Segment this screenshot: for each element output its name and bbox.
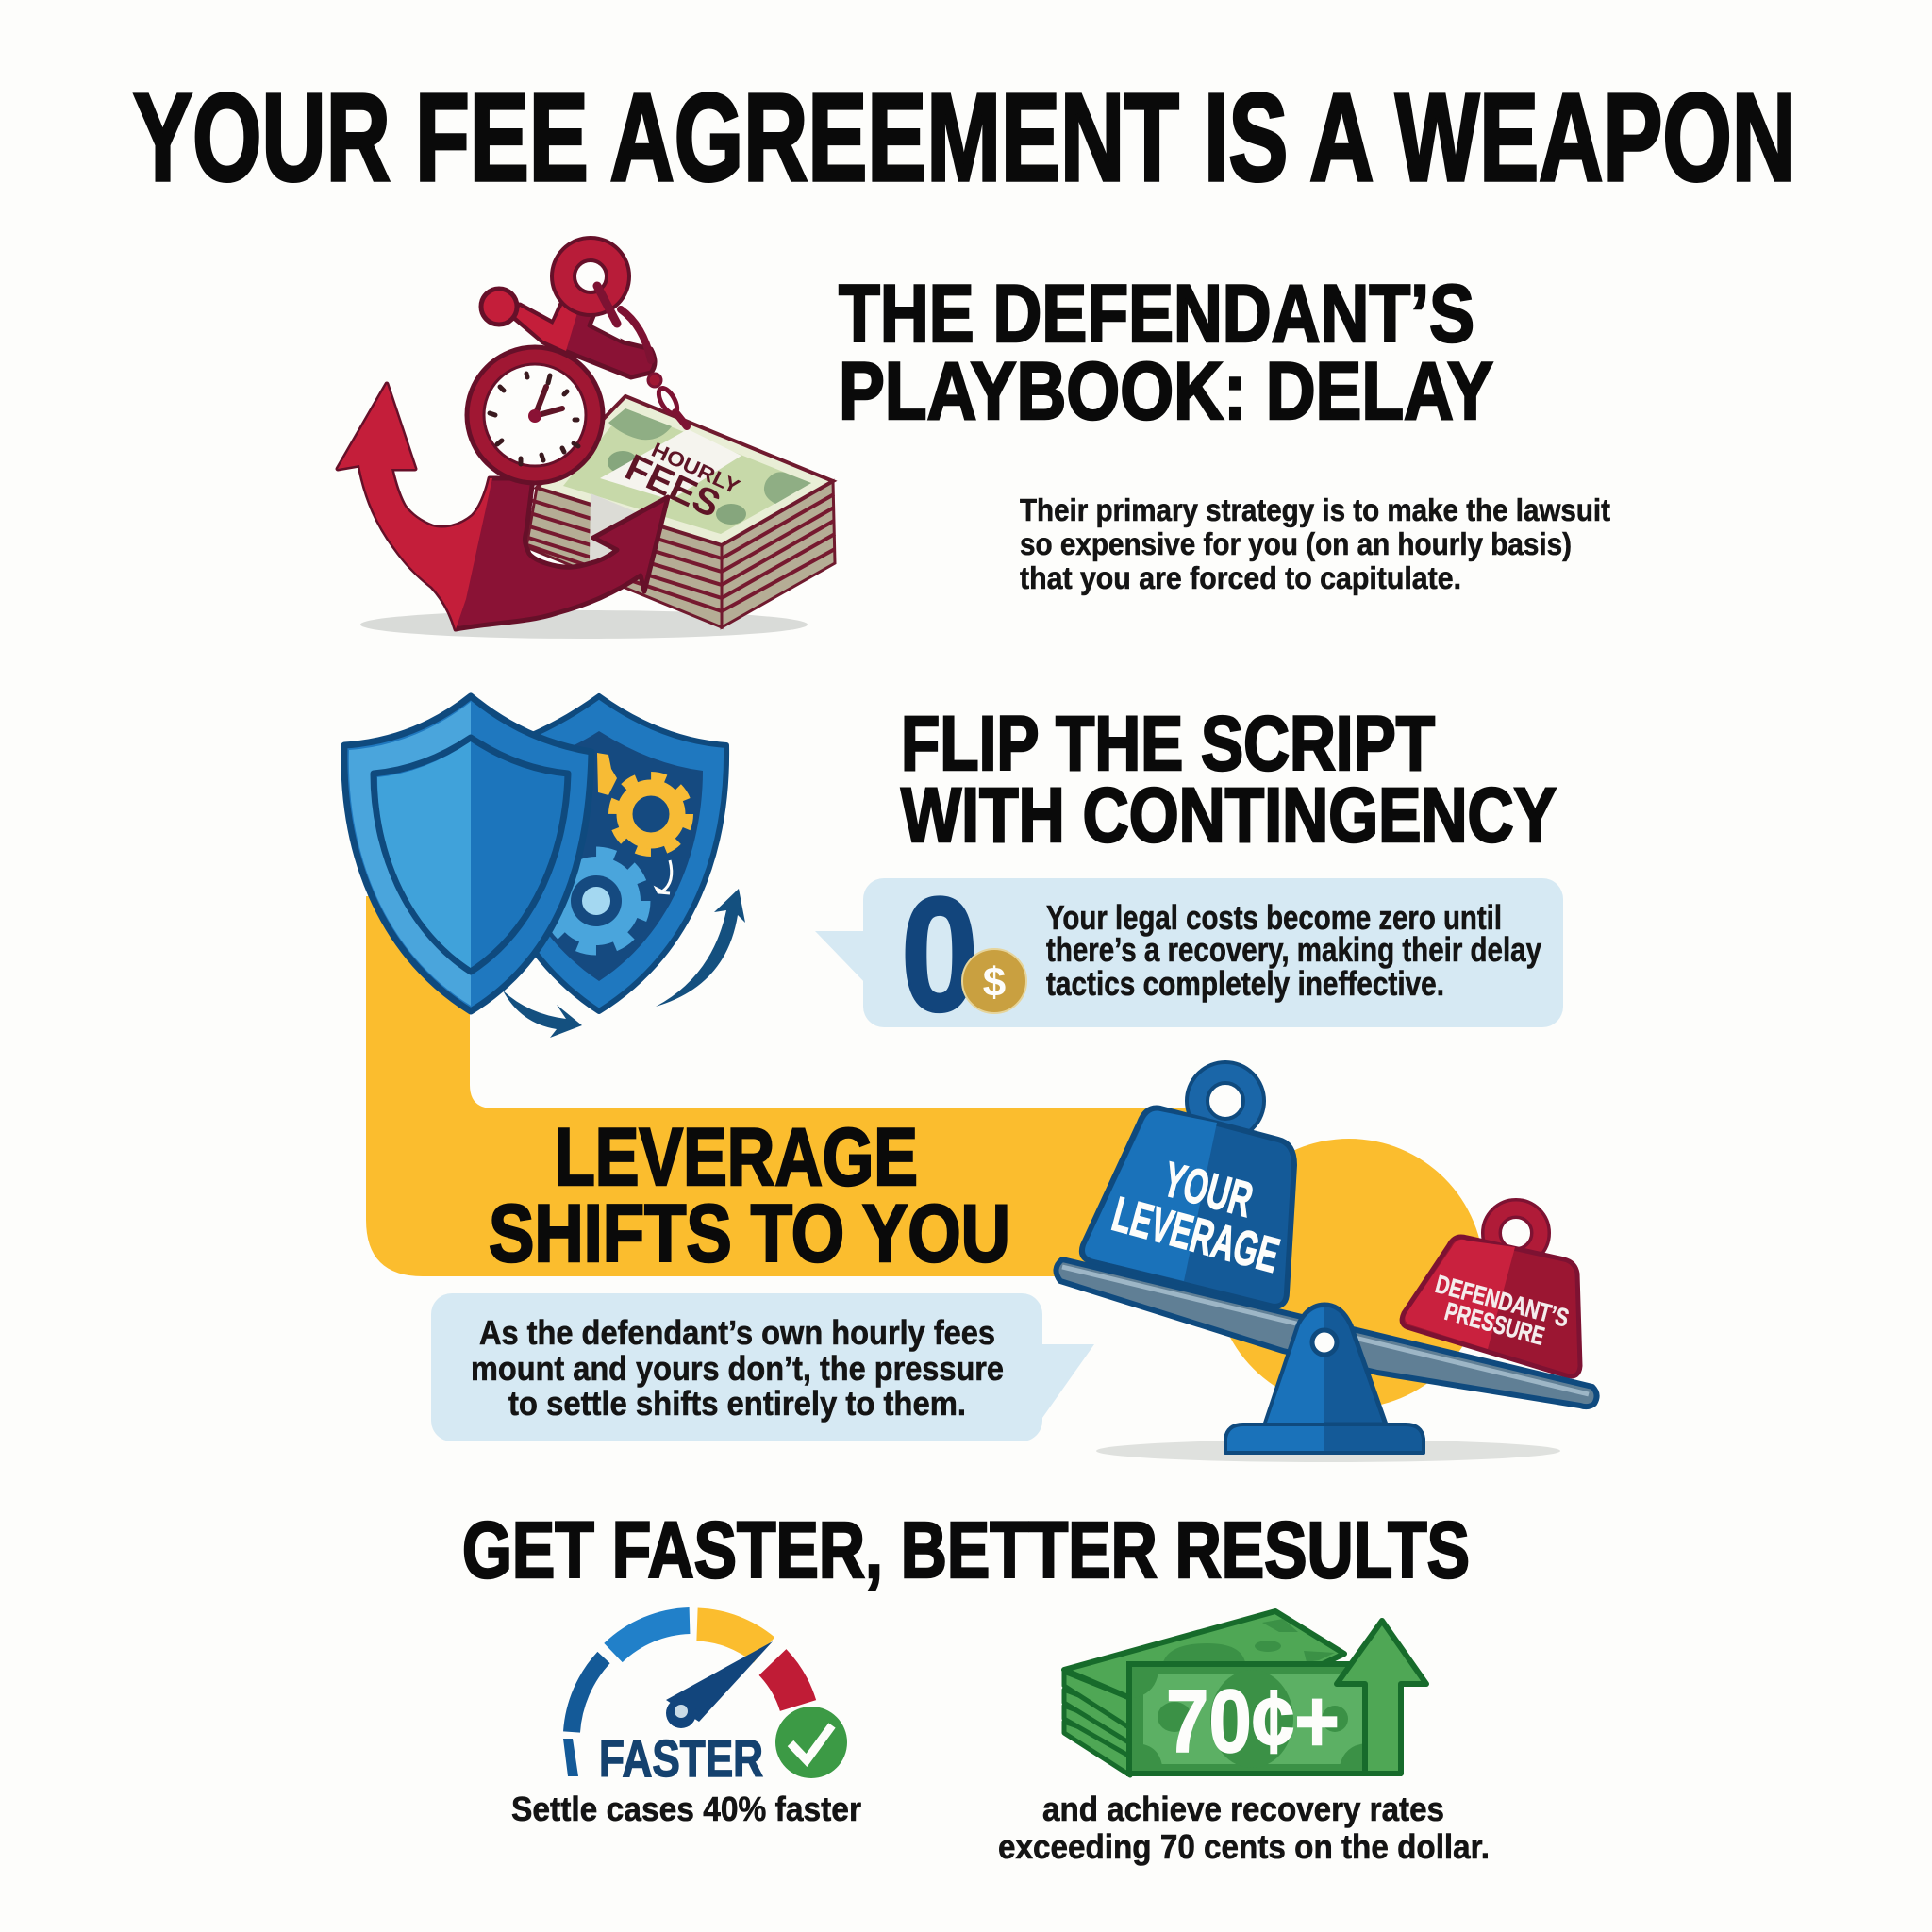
heading: leverage shifts to you: LEVERAGE [555, 1112, 918, 1203]
heading: the defendant's playbook: PLAYBOOK: DELAY [839, 346, 1493, 437]
weight: your leverage: YOUR [1158, 1152, 1258, 1228]
money stack [526, 396, 835, 627]
weight: defendant's pressure: PRESSURE [1441, 1297, 1547, 1351]
stat text: recovery rates: and achieve recovery rates [1042, 1790, 1444, 1828]
callout: pressure to settle: to settle shifts entirely to them. [508, 1384, 966, 1423]
heading: leverage shifts to you [489, 1112, 1010, 1279]
stat text: settle cases: Settle cases 40% faster [511, 1790, 861, 1828]
stat text: recovery rates: exceeding 70 cents on the dollar. [998, 1827, 1490, 1866]
back bill [1064, 1611, 1344, 1698]
icon: green check [775, 1707, 847, 1778]
text block: primary strategy: so expensive for you (on an hourly basis) [1020, 526, 1572, 561]
front bill [1129, 1664, 1399, 1774]
front shield [344, 696, 591, 1011]
needle [666, 1641, 773, 1728]
callout: pressure to settle [431, 1293, 1094, 1441]
callout text: there’s a recovery, making their delay [1046, 930, 1541, 969]
clock [467, 347, 603, 483]
yellow leverage band [366, 896, 1189, 1276]
text block: primary strategy: Their primary strategy is to make the lawsuit [1020, 492, 1610, 527]
beam [1056, 1259, 1597, 1407]
weight: defendant's pressure: DEFENDANT’S [1432, 1270, 1572, 1333]
icon: zero with coin: $ [983, 959, 1006, 1006]
money band: hourly fees [600, 429, 743, 526]
icon: speedometer gauge [563, 1621, 847, 1788]
callout: zero legal costs [815, 864, 1563, 1045]
callout text: tactics completely ineffective. [1046, 964, 1444, 1003]
icon: shields with gears [344, 696, 745, 1038]
weight: your leverage [1082, 1073, 1294, 1307]
callout text: Your legal costs become zero until [1046, 898, 1502, 937]
icon: anchor with clock and hourly fees money stack [338, 249, 835, 639]
blue gear [548, 853, 644, 949]
fulcrum [1225, 1305, 1424, 1453]
icon: zero with coin: 0 [901, 864, 978, 1045]
stacked bill edges [1064, 1672, 1130, 1775]
heading: flip the script: WITH CONTINGENCY [901, 773, 1557, 858]
heading: the defendant's playbook [839, 269, 1493, 437]
chain [597, 286, 687, 426]
heading: leverage shifts to you: SHIFTS TO YOU [489, 1189, 1010, 1279]
weight: your leverage: LEVERAGE [1107, 1187, 1285, 1284]
back shield [472, 696, 726, 1011]
callout: pressure to settle: mount and yours don’t, the pressure [471, 1349, 1004, 1388]
weight: defendant's pressure [1402, 1208, 1580, 1376]
arrow up [1337, 1621, 1426, 1774]
text block: primary strategy [1020, 492, 1610, 595]
anchor body [338, 249, 687, 629]
icon: balance scale with weights [1056, 1073, 1597, 1462]
arrow: upper curved [656, 889, 745, 1007]
money band: hourly fees: HOURLY [648, 438, 743, 499]
callout text [1046, 898, 1541, 1003]
heading: flip the script: FLIP THE SCRIPT [901, 701, 1435, 787]
callout: pressure to settle: As the defendant’s own hourly fees [479, 1313, 995, 1352]
heading: flip the script [901, 701, 1557, 858]
heading: get faster, better results: GET FASTER, BETTER RESULTS [462, 1506, 1470, 1594]
yellow circle behind scale [1214, 1139, 1484, 1408]
label: faster: FASTER [599, 1729, 763, 1788]
arrow: lower curved [503, 991, 582, 1038]
heading: the defendant's playbook: THE DEFENDANT’S [839, 269, 1474, 359]
icon: money stack with up arrow [1064, 1611, 1426, 1775]
label: 70 cents plus: 70¢+ [1166, 1672, 1340, 1772]
text block: primary strategy: that you are forced to capitulate. [1020, 560, 1461, 595]
yellow gear [614, 777, 688, 851]
money band: hourly fees: FEES [619, 446, 726, 526]
stat text: recovery rates [998, 1790, 1490, 1866]
